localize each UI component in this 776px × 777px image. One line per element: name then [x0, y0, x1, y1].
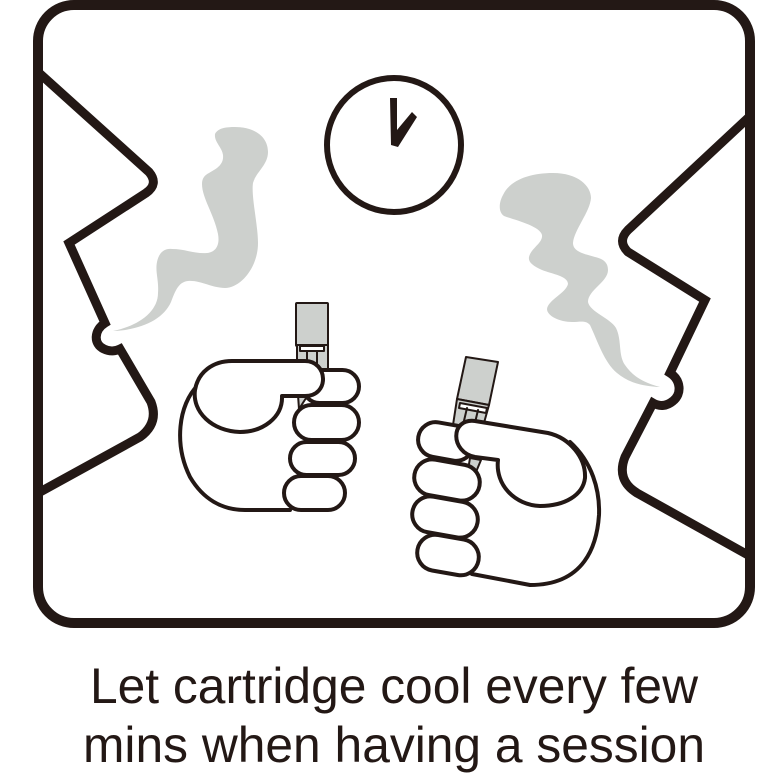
right smoke: [500, 173, 660, 387]
caption: [83, 658, 705, 773]
fingers: [284, 370, 359, 510]
left face: [38, 72, 153, 492]
caption line 1: Let cartridge cool every few: [90, 658, 699, 714]
palm: [180, 385, 290, 510]
right hand with cartridge: [409, 357, 599, 585]
frame panel: [38, 5, 750, 623]
thumb: [195, 361, 323, 432]
left hand with cartridge: [180, 303, 359, 510]
fingers: [409, 419, 483, 578]
cartridge: [296, 303, 328, 409]
caption line 2: mins when having a session: [83, 717, 705, 773]
cartridge: [453, 357, 498, 472]
clock: [327, 78, 461, 212]
left smoke: [113, 127, 268, 331]
clock hands: [390, 98, 417, 147]
palm: [472, 442, 599, 585]
thumb: [456, 421, 585, 506]
right face: [622, 118, 748, 555]
